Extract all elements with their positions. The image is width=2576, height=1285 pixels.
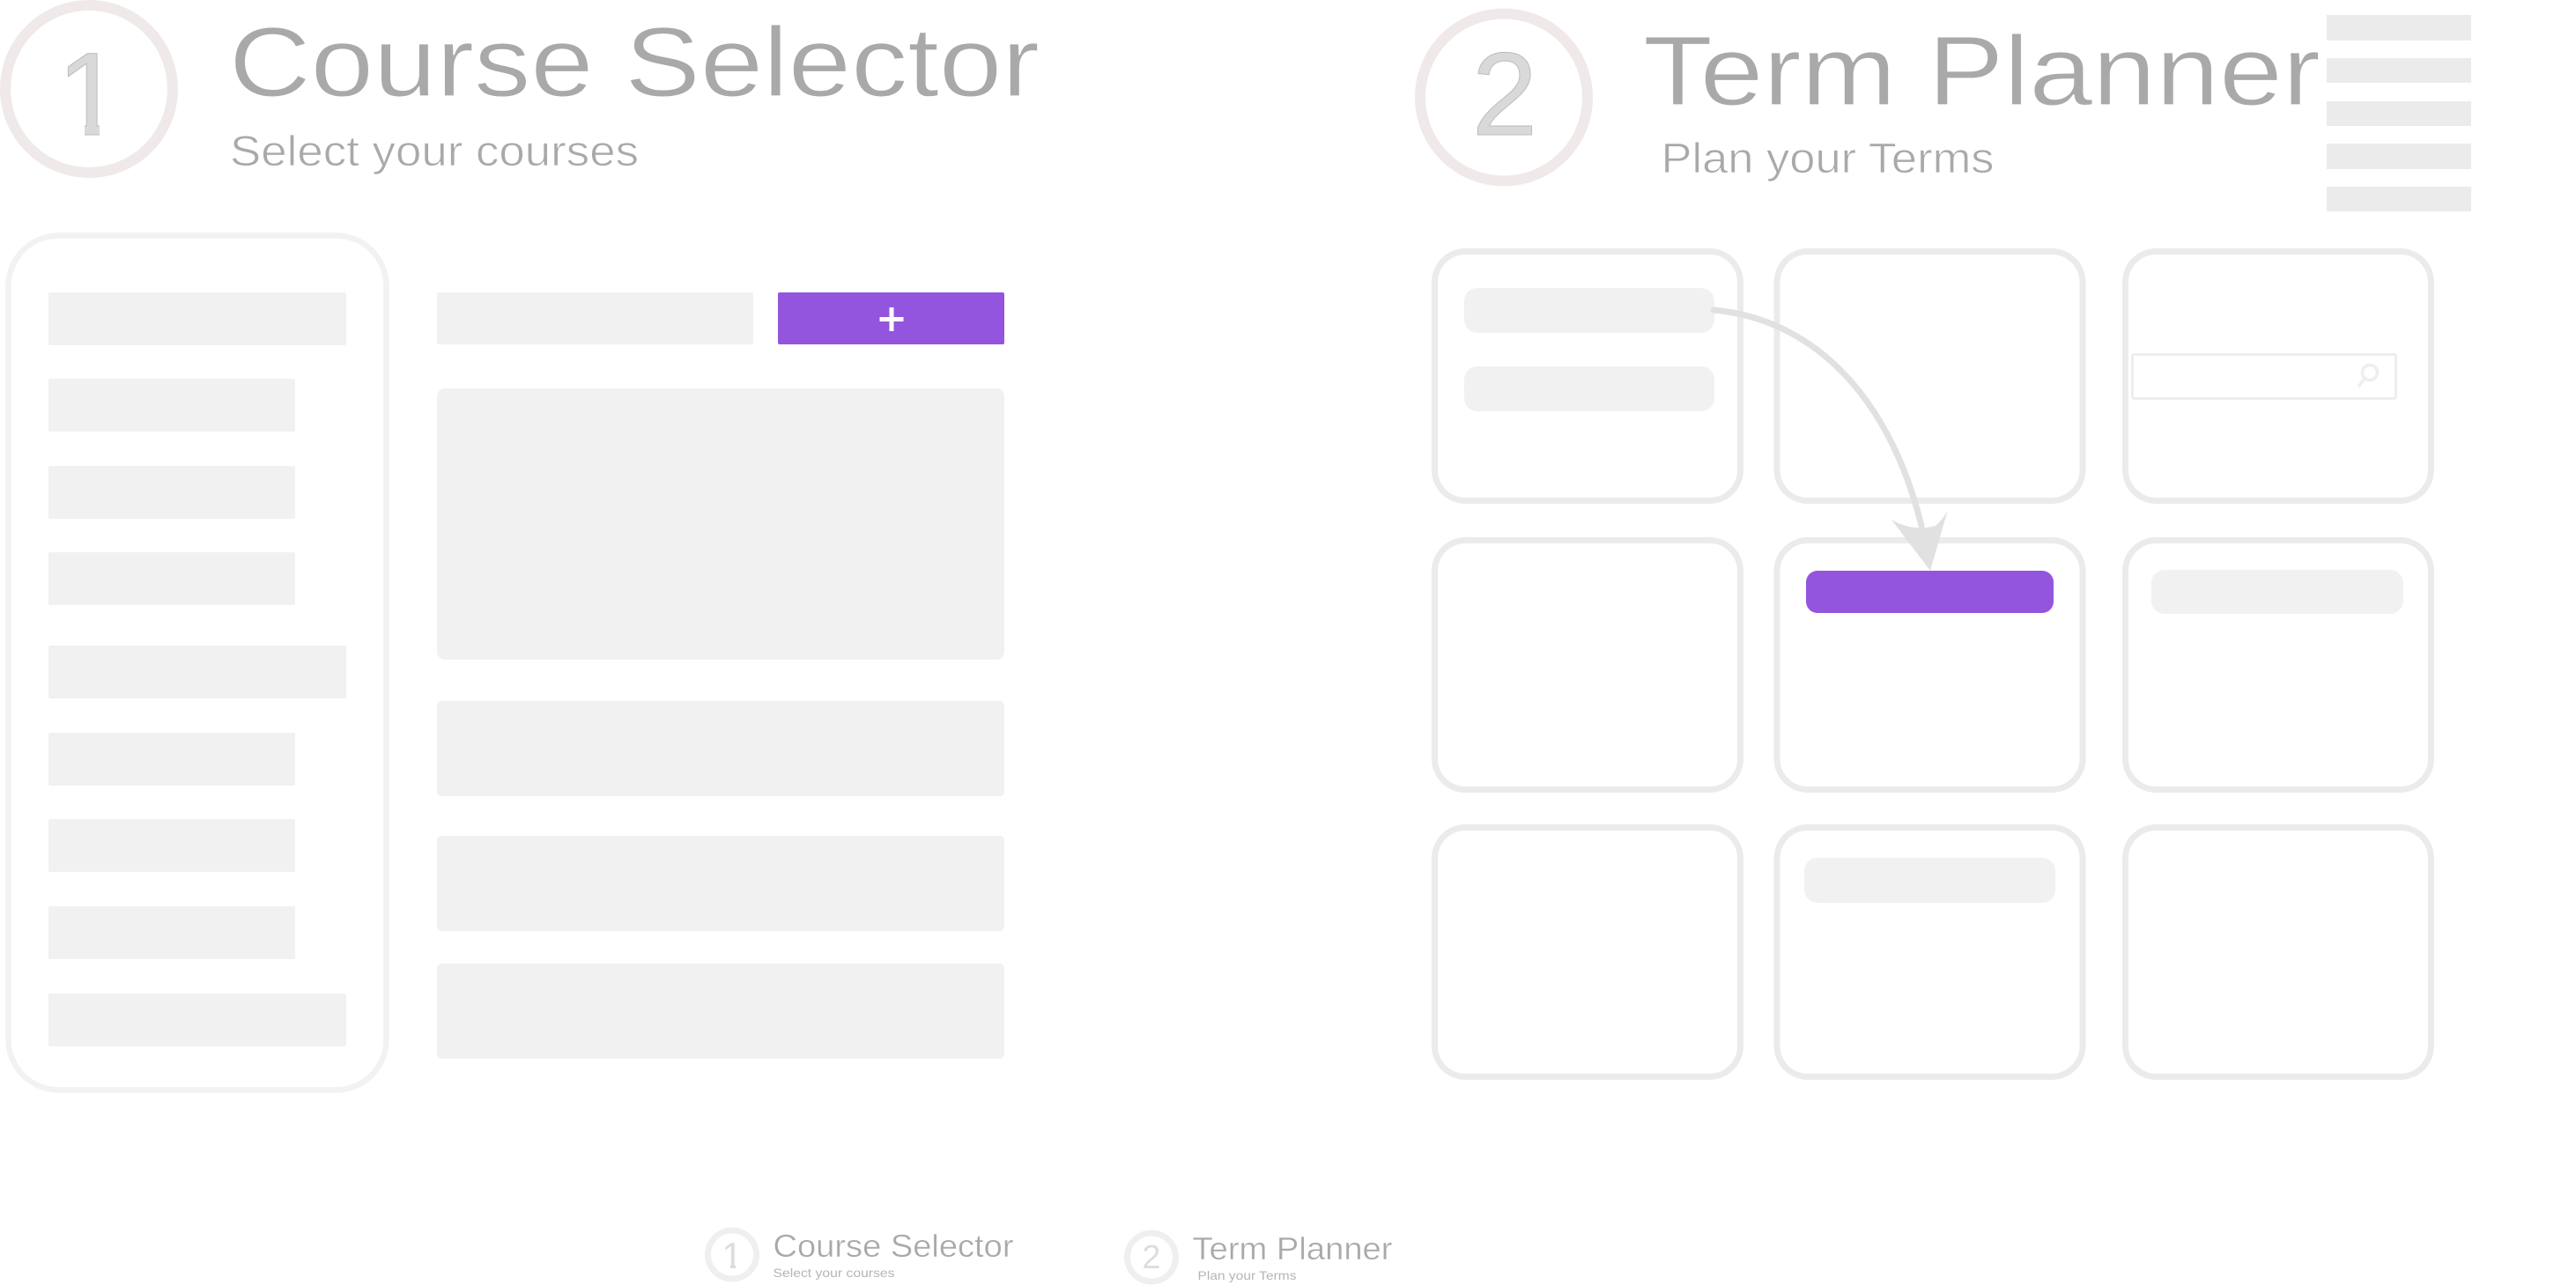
icon: legend step 1: 1 <box>722 1235 743 1276</box>
course result row 2 <box>437 836 1004 931</box>
term card row 1 column 2 <box>1777 252 2083 500</box>
search input field <box>437 292 753 344</box>
add course button <box>778 292 1004 344</box>
legend subtitle: Select your courses <box>774 1266 895 1280</box>
section: course selector <box>5 5 1040 1090</box>
legend: course selector <box>708 1228 1014 1280</box>
heading: Term Planner: Term Planner <box>1643 16 2321 126</box>
legend subtitle: Plan your Terms <box>1198 1268 1297 1282</box>
icon: step 1 circle <box>5 5 173 173</box>
term card row 3 column 3 <box>2125 828 2432 1076</box>
heading: Course Selector: Course Selector <box>229 7 1040 117</box>
term card row 2 column 2 with purple course <box>1777 541 2083 789</box>
menu icon stripes <box>2327 15 2471 211</box>
icon: legend step 2 <box>1128 1233 1175 1281</box>
term card row 3 column 2 <box>1777 828 2083 1076</box>
icon: step 1 circle: 1 <box>57 29 122 160</box>
term card row 1 column 1 <box>1434 252 1741 500</box>
term card row 2 column 1 <box>1434 541 1741 789</box>
icon: step 2 circle: 2 <box>1472 29 1537 160</box>
legend: term planner <box>1128 1230 1393 1282</box>
term card row 3 column 1 <box>1434 828 1741 1076</box>
section: term planner <box>1420 14 2471 1076</box>
panel: course list sidebar <box>9 236 386 1090</box>
legend title: Term Planner <box>1193 1230 1393 1267</box>
course result row 3 <box>437 964 1004 1059</box>
icon: step 2 circle <box>1420 14 1588 181</box>
icon: legend step 2: 2 <box>1142 1239 1161 1276</box>
subheading: Plan your Terms: Plan your Terms <box>1662 136 1995 182</box>
course result row 1 <box>437 701 1004 796</box>
legend title: Course Selector <box>774 1228 1014 1264</box>
icon: legend step 1 <box>708 1230 756 1279</box>
subheading: Select your courses: Select your courses <box>230 129 639 175</box>
term card row 1 column 3 with search box <box>2125 252 2432 500</box>
course detail panel <box>437 388 1004 660</box>
arrow: drag course to term <box>1714 310 1948 571</box>
term card row 2 column 3 <box>2125 541 2432 789</box>
